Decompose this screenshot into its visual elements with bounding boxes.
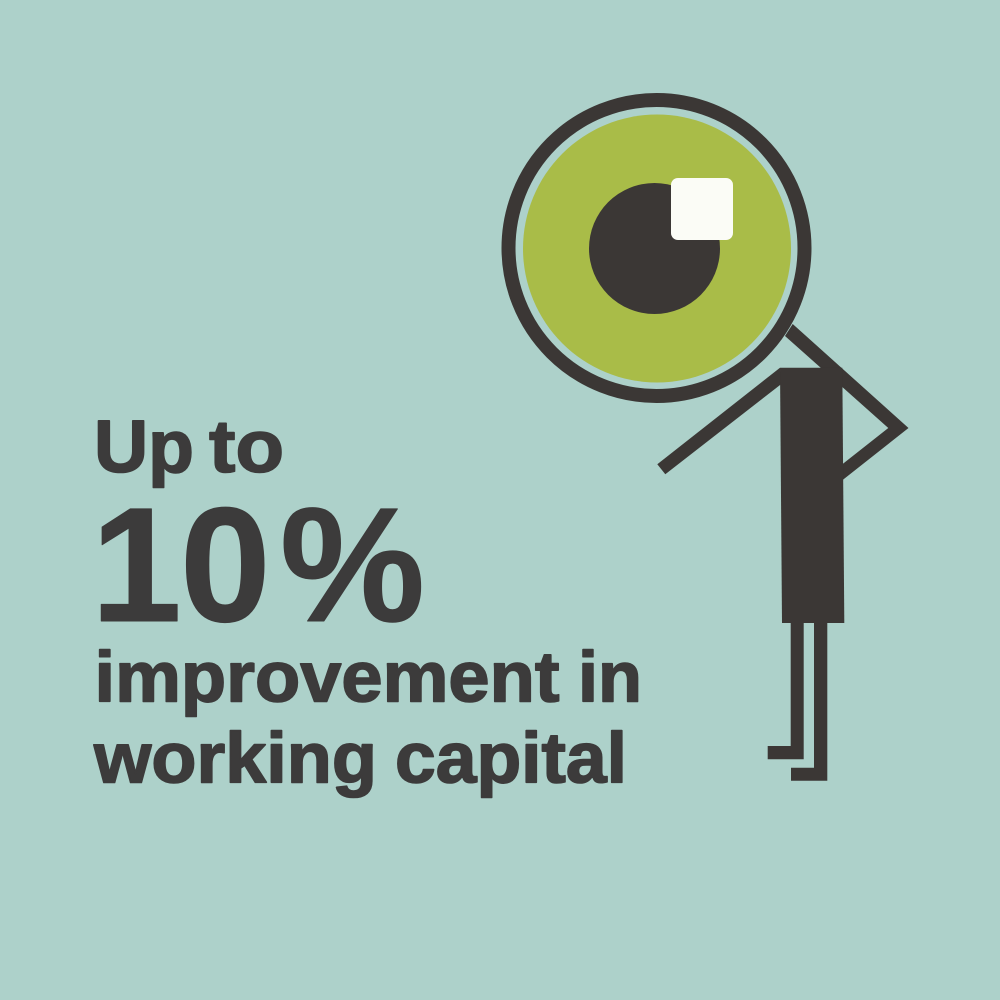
magnifying glass with eye [508, 100, 804, 396]
arm: right, hand on hip [785, 324, 908, 480]
text: working capital: capital [395, 720, 627, 798]
iris [523, 114, 791, 382]
text: Up to: to [209, 405, 284, 488]
text: Up to [94, 405, 284, 488]
figure: person with magnifying glass head [508, 100, 908, 781]
arm: left [657, 368, 782, 474]
text: working capital: working [93, 720, 377, 798]
eye highlight [671, 178, 733, 240]
glass ring [508, 100, 804, 396]
text: improvement in: in [578, 638, 642, 718]
big number: 10%: 10% [91, 473, 425, 656]
headline text block [91, 405, 642, 798]
leg: right with foot [791, 622, 827, 781]
leg: left with foot [768, 622, 804, 759]
text: improvement in: improvement [94, 638, 560, 718]
text: working capital [93, 720, 627, 798]
text: Up to: Up [94, 405, 194, 488]
pupil [589, 183, 720, 314]
body [780, 368, 844, 623]
